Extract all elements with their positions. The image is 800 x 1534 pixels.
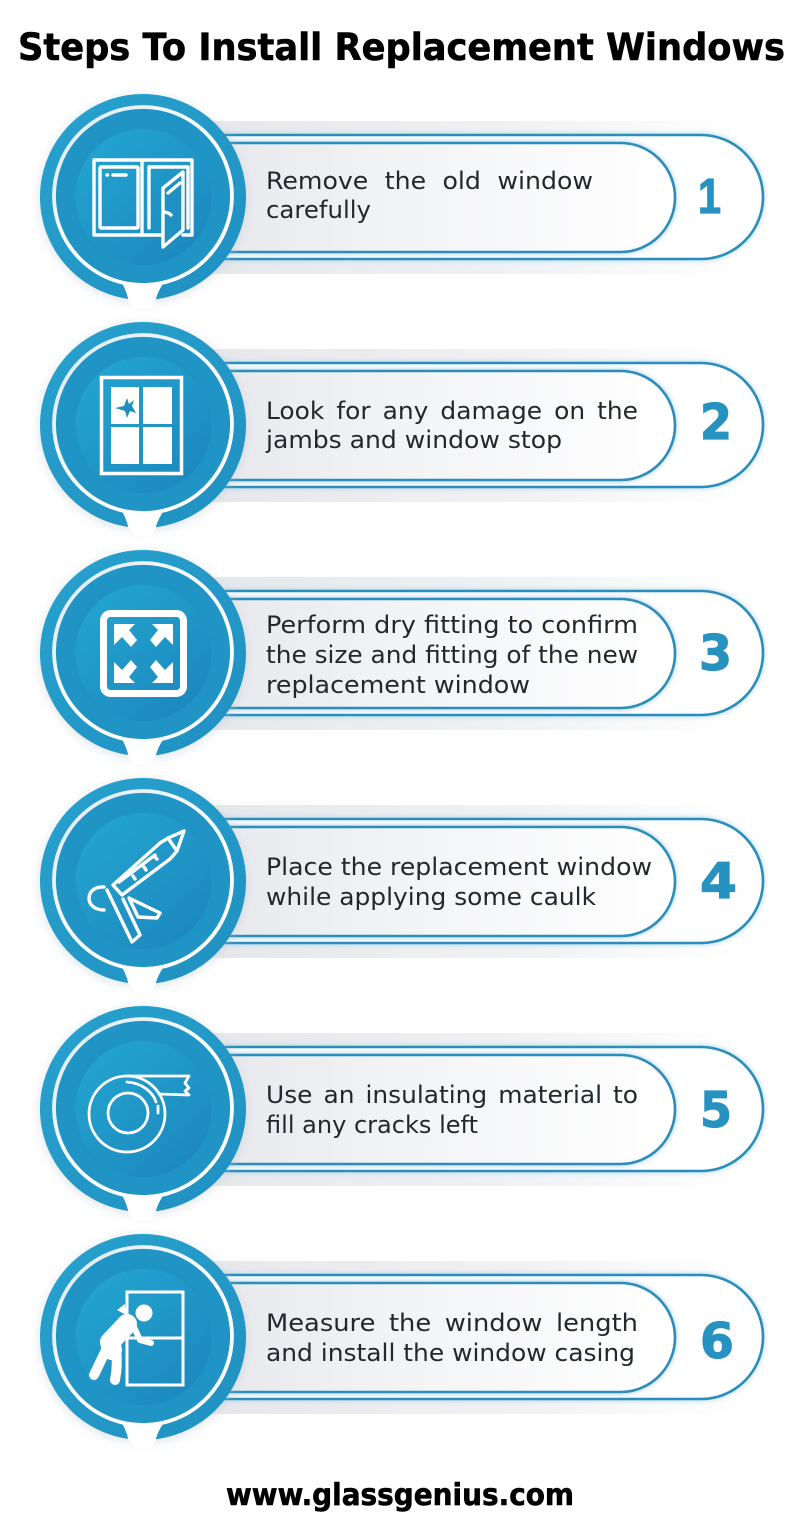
step 6 text: Measure the window length [266, 1309, 638, 1337]
step 2 text [265, 397, 638, 454]
step 5 text: Use an insulating material to [266, 1081, 638, 1109]
step 3 text: Perform dry fitting to confirm [266, 611, 638, 639]
step 3 number: 3 [699, 625, 732, 682]
step 3 pills [150, 577, 763, 730]
icon: cracked window [102, 378, 182, 474]
step 1 panel [39, 94, 763, 308]
step 1 text: Remove the old window [266, 167, 593, 195]
step 3 text: the size and fitting of the new [266, 641, 638, 669]
step 2 pills [150, 349, 763, 502]
step 2 medallion [39, 322, 247, 536]
step 5 text [266, 1081, 638, 1139]
step 5 number: 5 [700, 1082, 732, 1139]
step 4 medallion [39, 778, 247, 992]
icon: open window [94, 160, 192, 247]
step 4 number: 4 [700, 853, 737, 910]
step 4 text: Place the replacement window [266, 853, 652, 881]
step 6 number: 6 [700, 1313, 734, 1370]
step 6 text [266, 1309, 638, 1367]
step 5 medallion [39, 1006, 247, 1220]
step 1 pills [150, 121, 763, 274]
step 2 text: jambs and window stop [265, 426, 562, 454]
website footer: www.glassgenius.com [226, 1478, 574, 1513]
title: Steps To Install Replacement Windows [18, 26, 785, 69]
step 2 number: 2 [700, 394, 732, 451]
step 4 pills [150, 805, 763, 958]
step 6 text: and install the window casing [266, 1339, 635, 1367]
step 2 text: Look for any damage on the [266, 397, 638, 425]
step 5 pills [150, 1033, 763, 1186]
step 5 text: fill any cracks left [266, 1111, 478, 1139]
step 6 medallion [39, 1234, 247, 1448]
step 4 text: while applying some caulk [266, 883, 596, 911]
step 3 text [266, 611, 638, 699]
step 6 panel [39, 1234, 763, 1448]
step 4 panel [39, 778, 763, 992]
step 6 pills [150, 1261, 763, 1414]
step 1 text: carefully [266, 196, 371, 224]
step 3 text: replacement window [266, 671, 530, 699]
icon: tape roll [89, 1076, 189, 1152]
step 5 panel [39, 1006, 763, 1220]
icon: expand arrows [104, 614, 184, 694]
step 1 number: 1 [698, 170, 721, 224]
step 3 panel [39, 550, 763, 764]
step 1 medallion [39, 94, 247, 308]
step 4 text [266, 853, 652, 911]
step 2 panel [39, 322, 763, 536]
step 3 medallion [39, 550, 247, 764]
step 1 text [266, 167, 593, 224]
icon: caulk gun [89, 831, 184, 942]
icon: person fitting window [94, 1292, 183, 1385]
